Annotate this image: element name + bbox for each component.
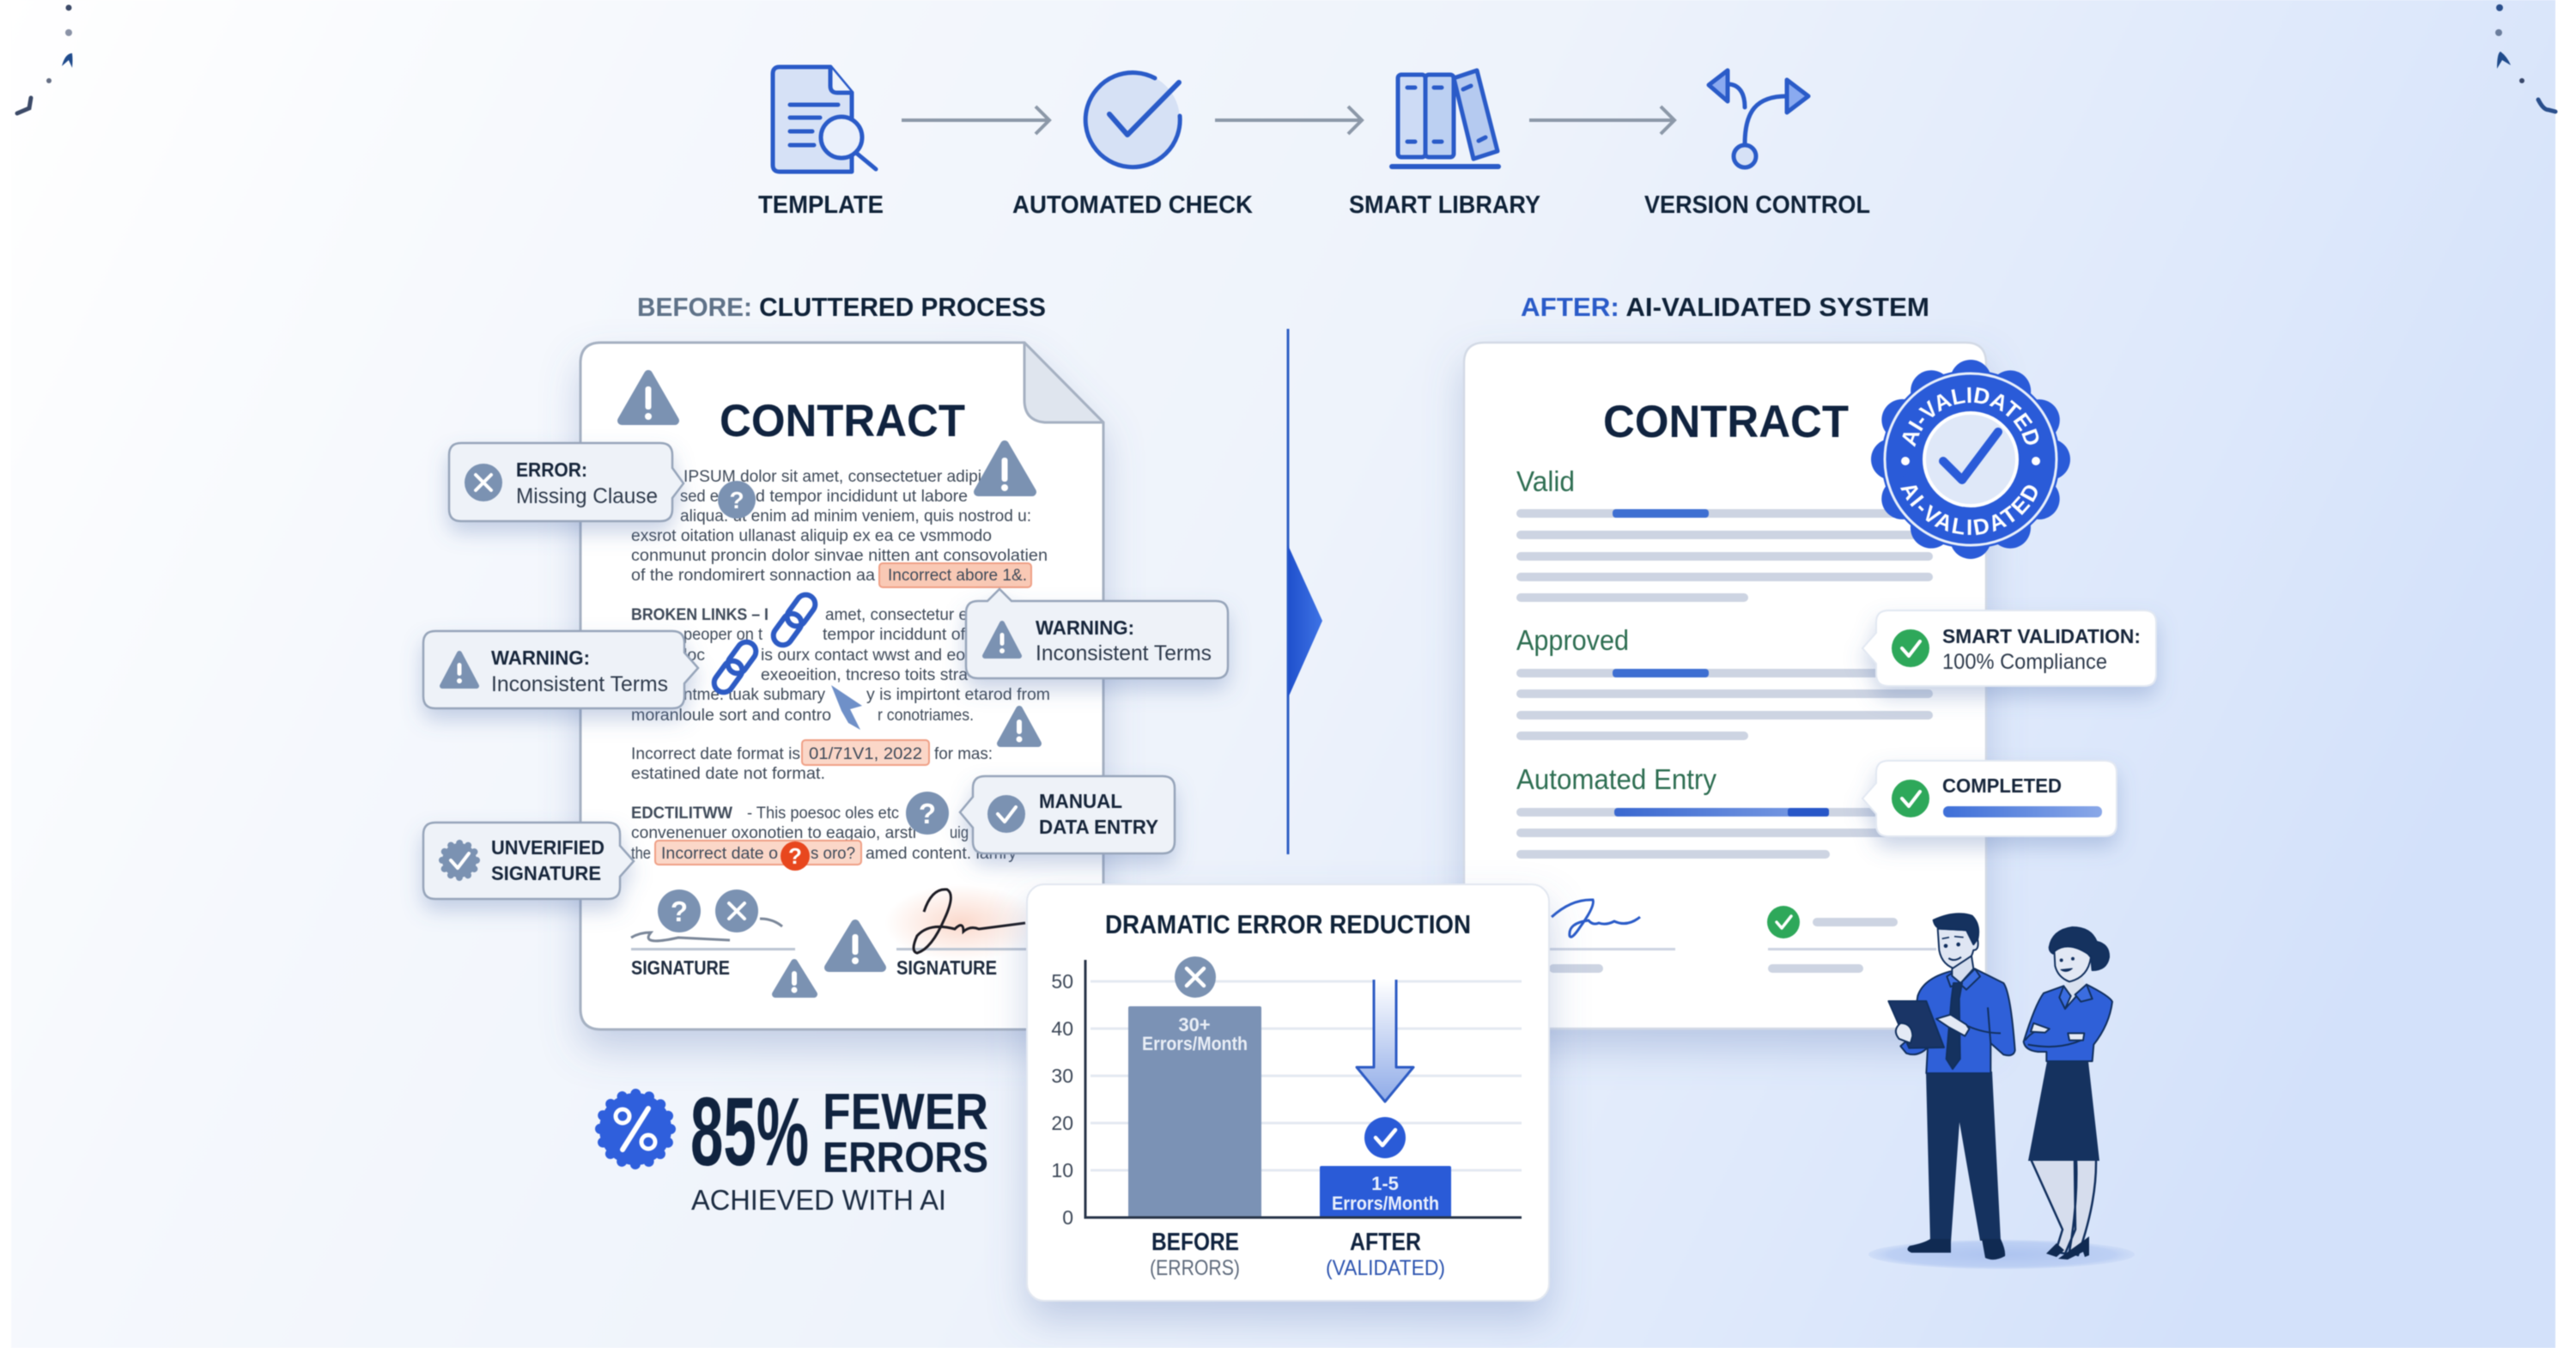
ground shadow	[1868, 1240, 2135, 1269]
icon: warning large bottom	[829, 924, 882, 968]
body text: broken links paragraph	[631, 606, 1050, 725]
callout: warning right	[966, 589, 1228, 678]
fewer: FEWER	[823, 1084, 988, 1140]
label: smart library: SMART LIBRARY	[1349, 191, 1540, 219]
body text: date paragraph: estatined date not format.	[631, 765, 825, 783]
signature block left	[631, 890, 795, 979]
label: version control: VERSION CONTROL	[1644, 191, 1870, 219]
x label: before: BEFORE	[1151, 1229, 1239, 1256]
gridlines	[1091, 981, 1522, 1170]
bar: after: Errors/Month	[1332, 1193, 1439, 1214]
label: template: TEMPLATE	[758, 191, 884, 219]
callout: warning left: WARNING:	[491, 647, 590, 669]
icon: percent badge	[599, 1093, 671, 1165]
icon: warning top	[622, 374, 675, 421]
bar: before: 30+	[1178, 1014, 1211, 1035]
icon: broken link 1	[769, 591, 819, 649]
body text: broken links paragraph: BROKEN LINKS – I	[631, 606, 769, 624]
body text: editability paragraph: EDCTILITWW	[631, 805, 732, 823]
arrow 1	[902, 106, 1049, 134]
callout: warning right: Inconsistent Terms	[1036, 641, 1212, 665]
figure: man	[1888, 914, 2015, 1260]
y axis labels: 10	[1051, 1159, 1073, 1181]
body text: broken links paragraph: is ourx contact wwst and eo	[761, 647, 965, 665]
section: automated entry	[1516, 763, 1933, 859]
achieved with AI: ACHIEVED WITH AI	[691, 1184, 946, 1216]
x label: after: AFTER	[1350, 1229, 1421, 1256]
icon: automated check	[1085, 72, 1180, 167]
folded corner	[1024, 343, 1103, 422]
highlight: incorrect date with error marker: s oro?	[811, 845, 855, 863]
label: automated check: AUTOMATED CHECK	[1012, 191, 1253, 219]
highlight: incorrect date with error marker: Incorrect date o	[661, 845, 778, 863]
body text: editability paragraph: - This poesoc oles etc	[747, 805, 899, 823]
body text: broken links paragraph: moranloule sort and contro	[631, 707, 831, 725]
chart card	[1027, 884, 1549, 1301]
icon: version control	[1709, 70, 1808, 167]
body text: broken links paragraph: tempor inciddunt of	[823, 626, 966, 644]
body text: editability paragraph: uig	[950, 824, 969, 842]
icon: question lower: ?	[919, 798, 936, 829]
x label: before	[1150, 1229, 1240, 1280]
body text: editability paragraph: convenenuer oxonotien to eagaio, arsti	[631, 824, 916, 842]
figure: woman	[2024, 927, 2112, 1260]
y axis labels: 40	[1051, 1017, 1073, 1040]
callout: smart validation: SMART VALIDATION:	[1942, 625, 2141, 647]
y axis labels: 30	[1051, 1065, 1073, 1087]
callout: manual data entry	[960, 776, 1175, 853]
body text: editability paragraph	[631, 805, 1018, 863]
signature block left: SIGNATURE	[631, 956, 730, 979]
icon: question: ?	[729, 487, 744, 513]
section: valid	[1516, 465, 1933, 602]
icon: warning right	[978, 445, 1032, 492]
body text: date paragraph: Incorrect date format is	[631, 745, 800, 763]
body text: first paragraph: conmunut proncin dolor sinvae nitten ant consovolatien	[631, 547, 1048, 565]
body text: date paragraph	[631, 745, 993, 783]
y axis labels: 20	[1051, 1112, 1073, 1134]
x label: before: (ERRORS)	[1150, 1256, 1240, 1280]
signature block left: ?	[671, 896, 688, 927]
body text: first paragraph: exsrot oitation ullanast aliquip ex ea ce vsmmodo	[631, 527, 992, 545]
icon: warning small bottom	[775, 962, 814, 994]
body text: broken links paragraph: exeoeition, tncreso toits stra	[761, 666, 968, 684]
highlight: incorrect date with error marker: ?	[788, 843, 802, 869]
body text: editability paragraph: amed content. lamry	[866, 845, 1018, 863]
icon: cursor	[831, 685, 862, 730]
callout: error missing clause: ERROR:	[516, 458, 587, 481]
errors: ERRORS	[823, 1133, 988, 1181]
y axis labels	[1051, 970, 1073, 1229]
icon: warning lower	[1000, 709, 1038, 744]
bar: before	[1128, 1006, 1261, 1217]
callout: unverified signature: SIGNATURE	[491, 862, 601, 884]
y axis labels: 50	[1051, 970, 1073, 993]
seal: AI-validated	[1870, 359, 2071, 560]
body text: first paragraph: aliqua. ut enim ad minim veniem, quis nostrod u:	[680, 507, 1031, 525]
body text: date paragraph: for mas:	[934, 745, 993, 763]
body text: broken links paragraph: peoper on t	[683, 626, 763, 644]
heading: before: BEFORE: CLUTTERED PROCESS	[637, 292, 1046, 322]
body text: broken links paragraph: amet, consectetur e	[825, 606, 968, 624]
arrow: reduction	[1357, 980, 1413, 1102]
section: approved: Approved	[1516, 624, 1629, 656]
callout: completed: COMPLETED	[1942, 774, 2062, 797]
signature block right	[884, 884, 1039, 979]
panel: dramatic error reduction chart	[1027, 884, 1549, 1301]
y axis labels: 0	[1062, 1206, 1073, 1229]
decorative corner marks: top right	[2495, 4, 2555, 112]
bar: after	[1320, 1166, 1451, 1217]
arrow 2	[1215, 106, 1362, 134]
body text: first paragraph	[631, 468, 1048, 585]
icon: check marker	[1364, 1117, 1406, 1158]
icon: question	[718, 481, 756, 519]
panel: after contract document	[1464, 343, 1986, 1029]
x label: after	[1326, 1229, 1445, 1280]
callout: warning left	[423, 631, 698, 708]
seal: AI-validated: AI-VALIDATED	[1901, 386, 2039, 447]
axes	[1085, 960, 1522, 1217]
callout: warning left: Inconsistent Terms	[491, 672, 668, 696]
x label: after: (VALIDATED)	[1326, 1256, 1445, 1280]
section: approved	[1516, 624, 1933, 740]
section: automated entry: Automated Entry	[1516, 763, 1716, 795]
callout: smart validation	[1862, 610, 2156, 686]
body text: first paragraph: IPSUM dolor sit amet, consectetuer adipi	[683, 468, 981, 486]
body text: broken links paragraph: loc	[683, 647, 705, 665]
arrow 3	[1529, 106, 1674, 134]
heading: after: AFTER: AI-VALIDATED SYSTEM	[1521, 292, 1929, 322]
body text: first paragraph: sed e	[680, 488, 719, 506]
highlight: incorrect date: 01/71V1, 2022	[809, 745, 922, 763]
85 percent: 85%	[690, 1078, 809, 1186]
icon: question lower	[906, 792, 949, 835]
body text: broken links paragraph: r conotriames.	[878, 707, 974, 725]
callout: manual data entry: MANUAL	[1039, 790, 1122, 812]
callout: smart validation: 100% Compliance	[1942, 650, 2107, 674]
contract title: CONTRACT	[1603, 397, 1849, 447]
body text: broken links paragraph: y is impirtont etarod from	[866, 686, 1050, 704]
body text: editability paragraph: the	[631, 845, 651, 863]
divider with direction arrow	[1286, 329, 1322, 854]
callout: error missing clause	[449, 443, 683, 521]
process flow	[758, 67, 1870, 219]
highlight: incorrect date with error marker	[655, 841, 861, 871]
callout: unverified signature	[423, 823, 634, 899]
callout: manual data entry: DATA ENTRY	[1039, 816, 1158, 838]
icon: template document with magnifier	[773, 67, 876, 172]
document sheet	[580, 343, 1103, 1029]
icon: smart library	[1392, 70, 1498, 167]
bar: before: Errors/Month	[1142, 1033, 1248, 1054]
callout: completed	[1862, 761, 2117, 836]
body text: broken links paragraph: ntme. tuak submary	[683, 686, 825, 704]
signature and approval row	[1549, 900, 1936, 973]
icon: x marker	[1175, 956, 1216, 998]
callout: unverified signature: UNVERIFIED	[491, 836, 605, 859]
stat: 85 percent fewer errors	[599, 1078, 988, 1216]
body text: first paragraph: of the rondomirert sonnaction aa	[631, 567, 875, 585]
contract title: CONTRACT	[720, 396, 965, 446]
document sheet	[1464, 343, 1986, 1029]
signature block right: SIGNATURE	[896, 956, 997, 979]
chart title: DRAMATIC ERROR REDUCTION	[1105, 909, 1471, 939]
section: valid: Valid	[1516, 465, 1575, 497]
icon: broken link 2	[710, 638, 760, 696]
highlight: incorrect date	[802, 740, 929, 765]
highlight: incorrect clause	[879, 563, 1031, 587]
bar: after: 1-5	[1371, 1173, 1399, 1194]
body text: first paragraph: d tempor incididunt ut labore	[756, 488, 968, 506]
seal: AI-validated: AI-VALIDATED	[1899, 484, 2038, 536]
decorative corner marks: top left	[17, 5, 72, 113]
illustration: two professionals	[1868, 914, 2135, 1269]
callout: warning right: WARNING:	[1036, 616, 1134, 639]
panel: before contract document	[580, 343, 1103, 1029]
callout: error missing clause: Missing Clause	[516, 484, 658, 508]
highlight: incorrect clause: Incorrect abore 1&.	[888, 567, 1027, 585]
